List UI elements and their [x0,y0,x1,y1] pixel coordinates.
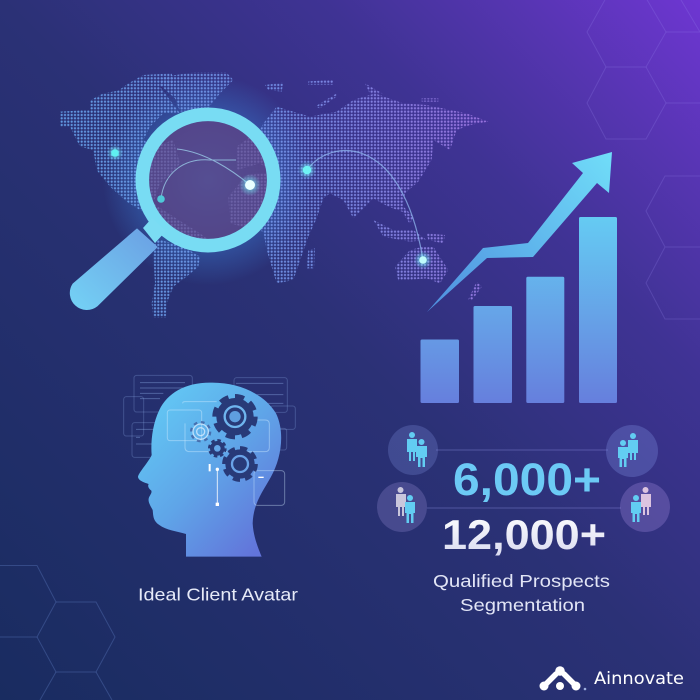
lower gear [224,448,256,480]
background UI panels behind head [124,375,295,457]
map node: North America [107,145,123,161]
people badge: top right [606,425,658,477]
stat: 12,000+: 12,000+ [442,511,606,558]
stat: 6,000+: 6,000+ [453,454,601,505]
route arc: Middle East to Australia [307,151,423,260]
people badge: top left [388,425,438,475]
large gear [215,397,255,437]
circuit nodes [209,464,264,506]
map node: Australia [414,251,432,269]
logo mark [540,666,586,690]
lens tint [148,120,268,240]
handle neck [143,218,166,243]
label: Qualified Prospects: Qualified Prospects [433,571,610,591]
lens node: Caribbean [157,195,165,203]
hexagon pattern: bottom left [0,566,115,700]
handle [70,229,157,310]
small gear [209,440,225,456]
hexagon pattern: top right [587,0,700,319]
bar chart [420,217,617,403]
label: Ideal Client Avatar: Ideal Client Avatar [138,584,298,604]
lens glow [103,75,313,285]
lens ring [142,114,274,246]
growth arrow [427,152,612,312]
magnifying glass [70,114,274,310]
people badge: lower right [620,482,670,532]
faint gear [191,422,210,441]
connector lines [427,450,621,508]
logo: Ainnovate [540,666,684,690]
label: Segmentation: Segmentation [460,595,585,615]
map node: Middle East [298,161,316,179]
lens node: Africa [239,174,261,196]
dotted world map [60,72,488,318]
lens routes [161,149,250,199]
people badge: lower left [377,482,427,532]
logo wordmark: Ainnovate [594,669,684,689]
head silhouette [138,383,281,557]
head with gears [138,383,285,557]
inner panels and circuit lines [167,402,285,505]
